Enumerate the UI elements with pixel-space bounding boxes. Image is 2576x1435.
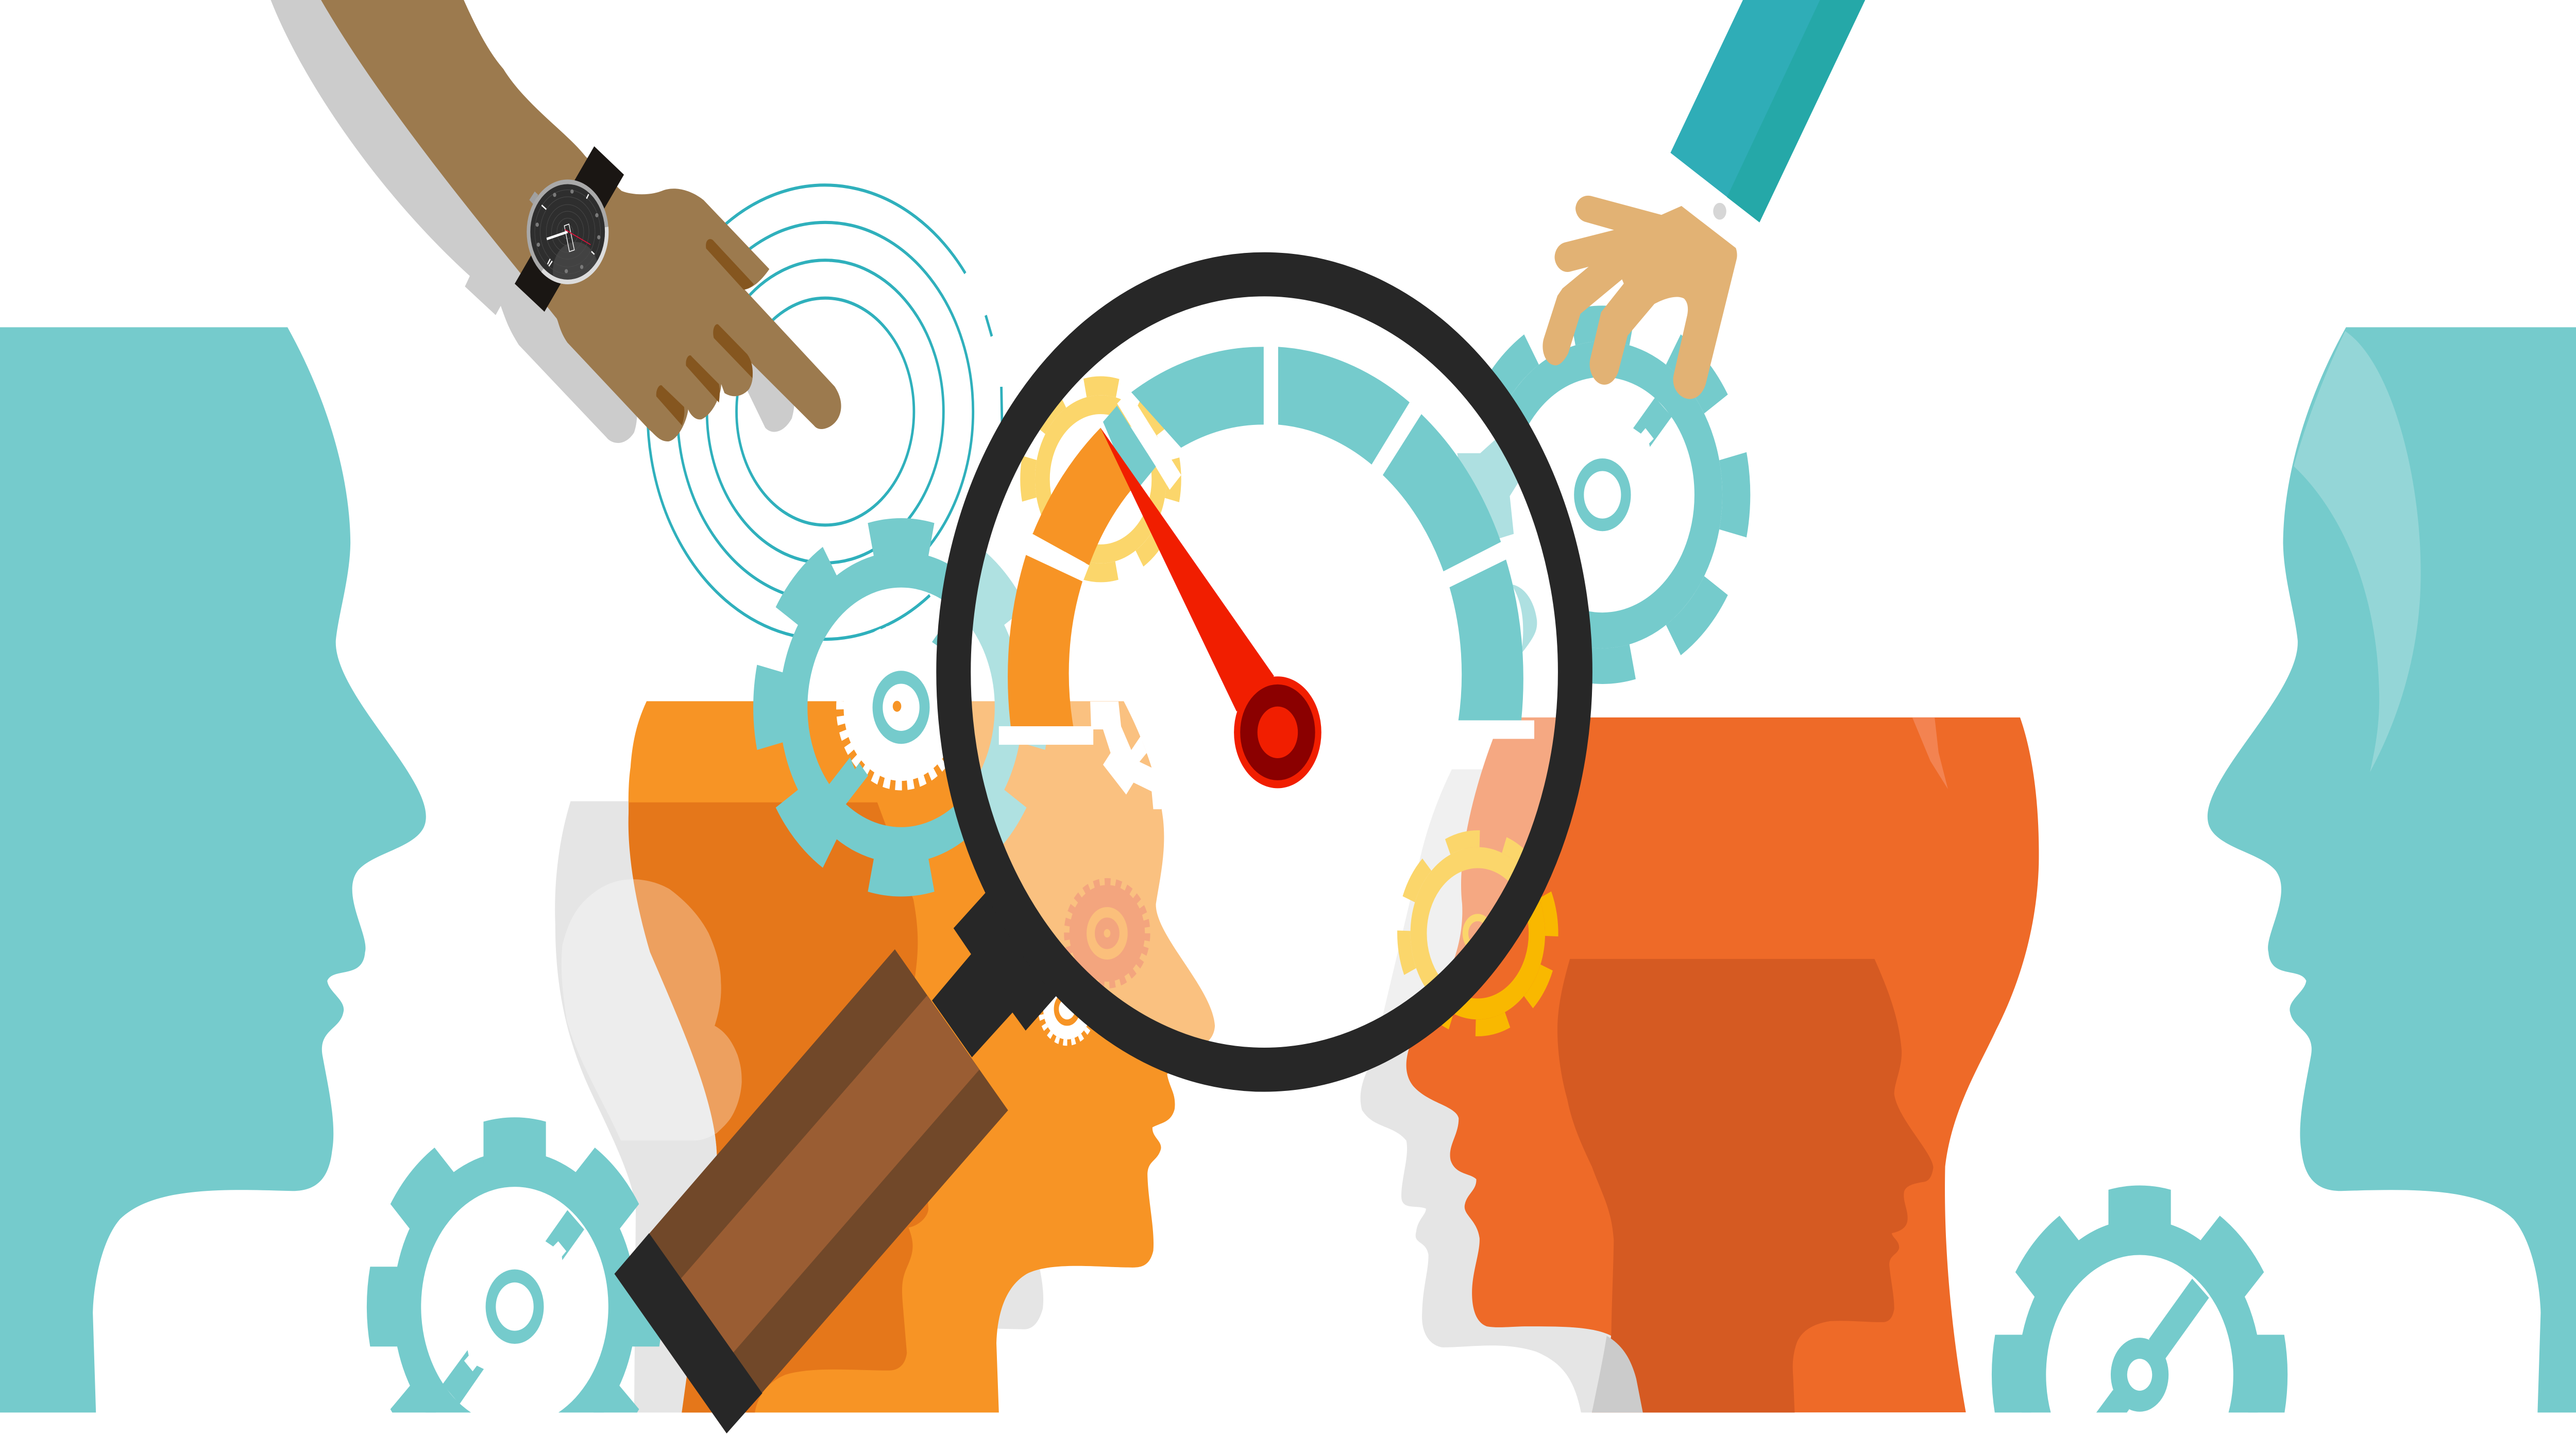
lens tint over scene — [969, 294, 1560, 1050]
lower right teal gear — [1992, 1186, 2287, 1412]
left brown hand and arm — [321, 0, 841, 441]
yellow gear behind gauge — [1028, 386, 1174, 573]
right tan hand — [1543, 196, 1737, 399]
pale highlight on ghost head — [562, 879, 742, 1140]
left arm shadow — [271, 0, 794, 443]
salmon gear in lens — [1067, 882, 1147, 985]
gauge needle and hub — [1100, 428, 1321, 788]
orange head — [629, 701, 1215, 1412]
gauge teal segments — [1103, 347, 1523, 721]
gear inside orange head with white teeth — [840, 629, 962, 785]
magnifier ring — [954, 275, 1575, 1070]
concentric target circles — [648, 185, 1002, 639]
upper right teal gear — [1468, 323, 1736, 666]
darker inner head on red-orange head — [1557, 959, 1934, 1412]
wristwatch — [515, 146, 624, 312]
magnifier neck — [932, 893, 1056, 1057]
gauge orange segments — [1008, 428, 1131, 726]
right teal head — [2208, 327, 2576, 1412]
right sleeve — [1670, 0, 1865, 223]
highlight streak on red-orange head — [1912, 717, 1948, 789]
gauge base bars — [999, 721, 1534, 745]
lens mask for background — [969, 294, 1560, 1050]
left teal head — [0, 327, 426, 1412]
small white gear below lens — [1041, 976, 1093, 1043]
gear fragments seen through lens — [1457, 431, 1537, 654]
gauge segment gaps — [1026, 391, 1181, 582]
gold gear on red-orange head — [1391, 823, 1565, 1044]
upper left teal gear — [767, 536, 1035, 879]
magnifier handle — [615, 949, 1008, 1433]
gauge dial — [999, 347, 1534, 745]
left grey ghost head — [555, 801, 1043, 1412]
dark orange inner head — [629, 802, 928, 1412]
red-orange head — [1406, 717, 2039, 1412]
lower left teal gear — [367, 1117, 663, 1412]
white gear cut-out in orange head — [1090, 702, 1161, 809]
right grey ghost head — [1361, 770, 1643, 1412]
